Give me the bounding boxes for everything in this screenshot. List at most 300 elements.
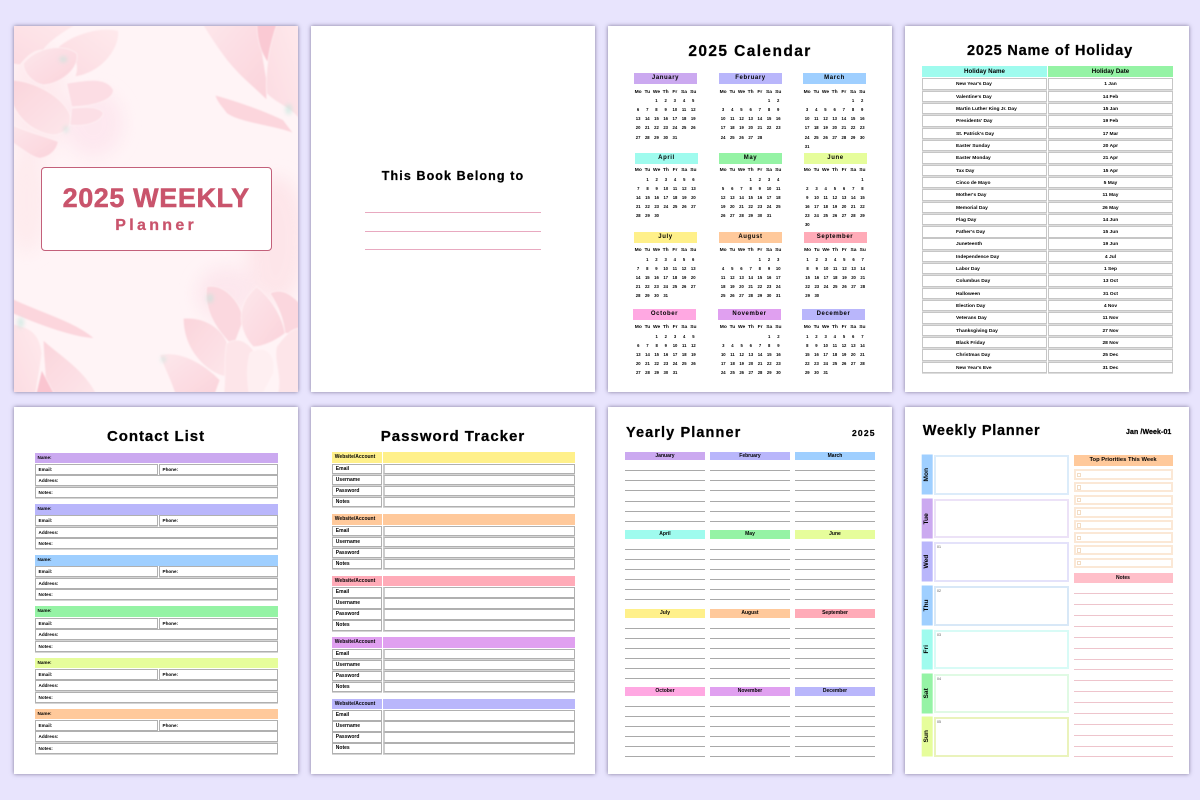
month: April: Th bbox=[663, 168, 669, 173]
holiday table: Valentine's Day bbox=[956, 95, 992, 100]
month: December: 26 bbox=[842, 361, 846, 366]
page: password tracker bbox=[311, 407, 595, 774]
holiday table: Independence Day bbox=[956, 255, 999, 260]
month: March: 26 bbox=[823, 135, 828, 140]
month: July: Fr bbox=[672, 248, 677, 253]
month: March: 22 bbox=[851, 125, 855, 130]
month: November: 11 bbox=[730, 352, 735, 357]
day: Tuesday: Tue bbox=[923, 513, 930, 524]
contact card 2: Address: bbox=[38, 530, 58, 535]
password entry 2: Notes bbox=[336, 561, 350, 567]
month: February: 23 bbox=[776, 125, 781, 130]
password entry 5: Email bbox=[336, 712, 349, 718]
month: December: Fr bbox=[842, 325, 846, 330]
month: December: 3 bbox=[824, 334, 827, 339]
month: June: Fr bbox=[842, 168, 846, 173]
month: November: 25 bbox=[730, 370, 735, 375]
month: June: 1 bbox=[861, 177, 864, 182]
month: March: 14 bbox=[842, 116, 846, 121]
contact card 5: Name: bbox=[38, 660, 52, 664]
month: October: 25 bbox=[682, 361, 687, 366]
month: September: 22 bbox=[805, 284, 810, 289]
month: May: 24 bbox=[767, 204, 771, 209]
month: June: 27 bbox=[842, 213, 846, 218]
month: February: February bbox=[735, 75, 766, 81]
month: October: Su bbox=[690, 325, 697, 330]
table header: Holiday Name bbox=[964, 68, 1005, 75]
month: December: 12 bbox=[842, 343, 846, 348]
page: holidays bbox=[905, 26, 1189, 392]
month: November: November bbox=[732, 311, 767, 317]
month: August: 3 bbox=[777, 257, 779, 262]
month: May: 4 bbox=[777, 177, 779, 182]
month: September bbox=[804, 232, 867, 298]
month: February: 12 bbox=[739, 116, 744, 121]
holiday table: 15 Apr bbox=[1103, 169, 1118, 174]
holiday table: 1 Sep bbox=[1104, 267, 1117, 272]
month: April: 3 bbox=[665, 177, 667, 182]
contact card 1: Address: bbox=[38, 478, 58, 483]
month: February: 26 bbox=[739, 135, 744, 140]
month: April: 11 bbox=[673, 186, 677, 191]
month: March: 7 bbox=[843, 107, 845, 112]
month: July: 12 bbox=[682, 266, 686, 271]
month: October: 30 bbox=[664, 370, 668, 375]
month: December: Th bbox=[832, 325, 838, 330]
month: March: Su bbox=[859, 90, 865, 95]
month: September: Th bbox=[832, 248, 838, 253]
month: March: 29 bbox=[851, 135, 855, 140]
month: August: 8 bbox=[759, 266, 761, 271]
month: March: 21 bbox=[842, 125, 846, 130]
month: February: 5 bbox=[740, 107, 743, 112]
month: December: 9 bbox=[815, 343, 818, 348]
month: July: Th bbox=[663, 248, 669, 253]
month: March: 6 bbox=[833, 107, 836, 112]
password entry 1: Notes bbox=[336, 499, 350, 505]
month: June: 7 bbox=[852, 186, 854, 191]
priorities header: Top Priorities This Week bbox=[1089, 457, 1157, 463]
month: January: 10 bbox=[672, 107, 677, 112]
holiday table: 27 Nov bbox=[1102, 329, 1118, 334]
heading: Yearly Planner: Yearly Planner bbox=[626, 424, 741, 440]
month: September: 20 bbox=[851, 275, 856, 280]
month: May: 28 bbox=[739, 213, 744, 218]
month: July: 2 bbox=[655, 257, 658, 262]
month: May: 1 bbox=[749, 177, 752, 182]
month: October: 8 bbox=[655, 343, 658, 348]
month: December: 13 bbox=[851, 343, 856, 348]
month: February: 20 bbox=[748, 125, 753, 130]
month: October: 12 bbox=[691, 343, 696, 348]
month: September: 26 bbox=[842, 284, 847, 289]
month: May: 11 bbox=[776, 186, 780, 191]
month: June: 13 bbox=[842, 195, 846, 200]
month: June: 14 bbox=[851, 195, 856, 200]
month: January: Th bbox=[663, 90, 669, 95]
contact card 3 bbox=[35, 555, 278, 601]
month: October: 9 bbox=[665, 343, 667, 348]
month: January: We bbox=[653, 90, 660, 95]
month: February: 25 bbox=[730, 135, 735, 140]
holiday table: 14 Feb bbox=[1103, 95, 1118, 100]
month: July: 27 bbox=[691, 284, 696, 289]
password entry 3 bbox=[332, 576, 575, 632]
month: July: Mo bbox=[635, 248, 642, 253]
contact card 3: Name: bbox=[38, 557, 52, 562]
notes header bbox=[1074, 573, 1172, 583]
month: August: 13 bbox=[739, 275, 744, 280]
month: April: 13 bbox=[691, 186, 696, 191]
month: February bbox=[719, 73, 782, 140]
password entry 5: Password bbox=[336, 734, 359, 740]
month: February: 2 bbox=[777, 98, 779, 103]
contact card 6 bbox=[35, 709, 278, 755]
month: August: 20 bbox=[739, 284, 744, 289]
month: May: Mo bbox=[720, 168, 727, 173]
contact card 4: Email: bbox=[38, 621, 52, 626]
month: May: 12 bbox=[721, 195, 725, 200]
contact card 5: Notes: bbox=[38, 695, 53, 700]
month: July bbox=[634, 232, 697, 298]
day: Thursday: Thu bbox=[923, 600, 930, 612]
month: March: 8 bbox=[852, 107, 854, 112]
month: March: 27 bbox=[832, 135, 837, 140]
month: October: 10 bbox=[673, 343, 677, 348]
month: February: 15 bbox=[767, 116, 771, 121]
month: November: 22 bbox=[767, 361, 772, 366]
month: December: 10 bbox=[823, 343, 828, 348]
month: March: 15 bbox=[851, 116, 855, 121]
month: January: 25 bbox=[682, 125, 686, 130]
month: January: Fr bbox=[672, 90, 677, 95]
month: September: 18 bbox=[833, 275, 837, 280]
holiday table: Father's Day bbox=[956, 230, 985, 235]
month: September: 23 bbox=[814, 284, 819, 289]
holiday table: Halloween bbox=[956, 292, 980, 297]
contact card 3: Address: bbox=[38, 581, 58, 586]
month: August: 19 bbox=[730, 284, 735, 289]
password entry 2: Email bbox=[336, 528, 349, 534]
month: May bbox=[719, 153, 782, 218]
month: July: 19 bbox=[682, 275, 686, 280]
August lines: August bbox=[741, 610, 759, 616]
day: Thursday: 02 bbox=[937, 589, 941, 593]
month: August: 10 bbox=[776, 266, 781, 271]
month: May: 23 bbox=[758, 204, 762, 209]
month: August: 6 bbox=[740, 266, 743, 271]
month: June: 10 bbox=[814, 195, 819, 200]
day: Monday: Mon bbox=[923, 468, 930, 482]
month: November: 6 bbox=[750, 343, 752, 348]
month: February: Sa bbox=[766, 90, 772, 95]
month: April: 30 bbox=[654, 213, 659, 218]
month: September: 11 bbox=[833, 266, 837, 271]
month: March: 13 bbox=[832, 116, 837, 121]
contact card 4: Phone: bbox=[162, 621, 178, 626]
month: December: 25 bbox=[832, 361, 837, 366]
month: January: 27 bbox=[636, 135, 640, 140]
month: January: Sa bbox=[681, 90, 687, 95]
month: July: 16 bbox=[654, 275, 659, 280]
holiday table: 31 Dec bbox=[1103, 366, 1118, 371]
month: January: 12 bbox=[691, 107, 696, 112]
month: July: We bbox=[653, 248, 660, 253]
October lines: October bbox=[655, 688, 675, 694]
contact card 1 bbox=[35, 453, 278, 499]
month: November: 27 bbox=[748, 370, 753, 375]
subtitle: Planner: Planner bbox=[115, 217, 197, 234]
password entry 3: Username bbox=[336, 600, 360, 606]
month: April: April bbox=[658, 155, 675, 161]
month: March: 2 bbox=[861, 98, 863, 103]
contact card 6: Phone: bbox=[162, 723, 178, 728]
month: August: Su bbox=[775, 248, 781, 253]
month: August: 5 bbox=[731, 266, 733, 271]
January lines: January bbox=[655, 453, 675, 459]
month: July: 8 bbox=[646, 266, 648, 271]
month: August: 1 bbox=[759, 257, 761, 262]
month: April: 14 bbox=[636, 195, 641, 200]
holiday table: Veterans Day bbox=[956, 316, 987, 321]
holiday table: 1 Jan bbox=[1104, 82, 1117, 87]
month: June: We bbox=[822, 168, 829, 173]
month: June: 9 bbox=[806, 195, 808, 200]
April lines: April bbox=[659, 531, 671, 537]
month: July: 17 bbox=[663, 275, 668, 280]
month: March: 31 bbox=[805, 144, 809, 149]
month: February: 18 bbox=[730, 125, 735, 130]
month: December: 16 bbox=[814, 352, 819, 357]
month: September: Su bbox=[860, 248, 866, 253]
month: March: 5 bbox=[824, 107, 827, 112]
month: October: 6 bbox=[637, 343, 639, 348]
month: June: 15 bbox=[860, 195, 865, 200]
holiday table: Columbus Day bbox=[956, 279, 990, 284]
month: April: 6 bbox=[692, 177, 695, 182]
password entry 4: Notes bbox=[336, 684, 350, 690]
month: March: 4 bbox=[815, 107, 817, 112]
page: 2025 calendar bbox=[608, 26, 892, 392]
month: July: Su bbox=[690, 248, 696, 253]
month: May: 29 bbox=[748, 213, 753, 218]
month: August: 18 bbox=[721, 284, 725, 289]
month: August: 15 bbox=[758, 275, 762, 280]
month: October: 17 bbox=[673, 352, 677, 357]
month: March: 11 bbox=[814, 116, 818, 121]
month: October: 2 bbox=[665, 334, 667, 339]
month: September: 13 bbox=[851, 266, 856, 271]
month: July: 11 bbox=[673, 266, 677, 271]
holiday table: 11 Nov bbox=[1103, 316, 1118, 321]
month: January: 24 bbox=[672, 125, 677, 130]
day: Wednesday bbox=[922, 542, 1069, 582]
month: September: 5 bbox=[843, 257, 846, 262]
password entry 5: Notes bbox=[336, 745, 350, 751]
holiday table: Flag Day bbox=[956, 218, 976, 223]
month: April: 20 bbox=[691, 195, 696, 200]
month: March: 12 bbox=[823, 116, 828, 121]
month: November: 15 bbox=[767, 352, 772, 357]
month: August: 30 bbox=[767, 293, 771, 298]
month: November: 12 bbox=[739, 352, 744, 357]
holiday table: Cinco de Mayo bbox=[956, 181, 990, 186]
month: May: 9 bbox=[759, 186, 761, 191]
month: October: 15 bbox=[654, 352, 659, 357]
holiday table: 19 Jun bbox=[1103, 242, 1118, 247]
day: Thursday bbox=[922, 586, 1069, 626]
month: January: 4 bbox=[683, 98, 685, 103]
day: Monday bbox=[922, 454, 1069, 495]
contact card 2: Phone: bbox=[162, 518, 178, 523]
month: November: 24 bbox=[721, 370, 726, 375]
month: November: Tu bbox=[730, 325, 735, 330]
month: June: 28 bbox=[851, 213, 856, 218]
day: Saturday: 04 bbox=[937, 676, 941, 680]
month: June: 22 bbox=[860, 204, 865, 209]
month: June: 6 bbox=[843, 186, 845, 191]
day: Friday: 03 bbox=[937, 633, 941, 637]
password entry 2: Username bbox=[336, 539, 360, 545]
notes header: Notes bbox=[1116, 575, 1130, 581]
month: December: 4 bbox=[834, 334, 836, 339]
month: July: 14 bbox=[636, 275, 640, 280]
month: December: 30 bbox=[814, 370, 819, 375]
June lines: June bbox=[829, 531, 841, 537]
month: April: 16 bbox=[654, 195, 659, 200]
heading: Password Tracker: Password Tracker bbox=[381, 428, 525, 445]
page: cover bbox=[14, 26, 298, 392]
month: May: 18 bbox=[776, 195, 781, 200]
month: January: 20 bbox=[636, 125, 640, 130]
heading: 2025 Name of Holiday: 2025 Name of Holiday bbox=[967, 42, 1133, 58]
holiday table: Juneteenth bbox=[956, 242, 982, 247]
month: March: Mo bbox=[804, 90, 811, 95]
month: July: July bbox=[658, 234, 673, 240]
month: January: 21 bbox=[645, 125, 650, 130]
month: June: Tu bbox=[814, 168, 819, 173]
month: August: 16 bbox=[767, 275, 771, 280]
month: January: January bbox=[652, 75, 679, 81]
month: November: 19 bbox=[739, 361, 744, 366]
month: November: 3 bbox=[722, 343, 724, 348]
month: April: Sa bbox=[681, 168, 687, 173]
contact card 3: Notes: bbox=[38, 592, 53, 597]
month: November: We bbox=[738, 325, 745, 330]
month: October: 13 bbox=[636, 352, 641, 357]
month: November: 16 bbox=[776, 352, 781, 357]
month: June: Mo bbox=[804, 168, 811, 173]
month: October: 16 bbox=[664, 352, 668, 357]
holiday table: Thanksgiving Day bbox=[956, 329, 998, 334]
contact card 5 bbox=[35, 658, 278, 704]
month: January: 9 bbox=[664, 107, 667, 112]
month: April: 10 bbox=[664, 186, 668, 191]
month: September: 24 bbox=[824, 284, 828, 289]
contact card 1: Phone: bbox=[162, 467, 178, 472]
month: January: 3 bbox=[674, 98, 676, 103]
holiday table: 31 Oct bbox=[1103, 292, 1118, 297]
password entry 4: Email bbox=[336, 651, 349, 657]
month: June: 30 bbox=[805, 222, 810, 227]
month: November: Su bbox=[775, 325, 782, 330]
month: February: We bbox=[738, 90, 745, 95]
month: November: 30 bbox=[776, 370, 781, 375]
month: October: Fr bbox=[673, 325, 677, 330]
month: April bbox=[635, 153, 698, 218]
month: June: 4 bbox=[824, 186, 827, 191]
password entry 3: Website/Account bbox=[335, 578, 375, 584]
month: July: 18 bbox=[672, 275, 677, 280]
month: June: 21 bbox=[851, 204, 856, 209]
month: May: 2 bbox=[759, 177, 761, 182]
month: May: 13 bbox=[730, 195, 735, 200]
password entry 3: Notes bbox=[336, 622, 350, 628]
month: September: Fr bbox=[842, 248, 847, 253]
month: April: Su bbox=[690, 168, 697, 173]
month: May: 17 bbox=[767, 195, 771, 200]
month: October: 28 bbox=[645, 370, 650, 375]
contact card 5: Email: bbox=[38, 672, 52, 677]
day: Sunday: Sun bbox=[923, 731, 930, 743]
month: January: 29 bbox=[654, 135, 659, 140]
month: July: 7 bbox=[637, 266, 639, 271]
month: March: 9 bbox=[861, 107, 863, 112]
month: February: 3 bbox=[722, 107, 724, 112]
month: December: Mo bbox=[804, 325, 811, 330]
contact card 4: Address: bbox=[38, 632, 58, 637]
month: October: 23 bbox=[664, 361, 668, 366]
month: January: 18 bbox=[682, 116, 686, 121]
month: April: 22 bbox=[645, 204, 650, 209]
password entry 2 bbox=[332, 514, 575, 570]
month: March: Sa bbox=[850, 90, 856, 95]
password entry 1: Email bbox=[336, 466, 349, 472]
month: November: Th bbox=[748, 325, 754, 330]
month: September: Mo bbox=[804, 248, 811, 253]
month: November: 29 bbox=[767, 370, 772, 375]
month: September: 14 bbox=[860, 266, 865, 271]
month: October: 11 bbox=[682, 343, 686, 348]
month: April: 26 bbox=[682, 204, 687, 209]
month: June: 20 bbox=[842, 204, 846, 209]
month: August: 7 bbox=[749, 266, 752, 271]
month: June: 19 bbox=[833, 204, 837, 209]
month: May: 25 bbox=[776, 204, 781, 209]
month: July: 9 bbox=[655, 266, 658, 271]
holiday table: 15 Jan bbox=[1103, 107, 1118, 112]
month: May: 6 bbox=[731, 186, 733, 191]
month: December: 22 bbox=[805, 361, 810, 366]
month: August: Th bbox=[748, 248, 754, 253]
month: June bbox=[804, 153, 867, 227]
month: August: 22 bbox=[758, 284, 762, 289]
month: July: 6 bbox=[692, 257, 694, 262]
month: December: 29 bbox=[805, 370, 810, 375]
holiday table: 19 Feb bbox=[1103, 119, 1118, 124]
contact card 6: Address: bbox=[38, 734, 58, 739]
month: October: 27 bbox=[636, 370, 641, 375]
month: June: Th bbox=[832, 168, 838, 173]
month: May: 26 bbox=[721, 213, 725, 218]
month: October: Mo bbox=[635, 325, 642, 330]
month: November: 9 bbox=[777, 343, 780, 348]
month: March: Th bbox=[832, 90, 838, 95]
month: April: 5 bbox=[683, 177, 685, 182]
month: May: 21 bbox=[739, 204, 744, 209]
month: October: 14 bbox=[645, 352, 650, 357]
cover title box bbox=[41, 167, 272, 251]
